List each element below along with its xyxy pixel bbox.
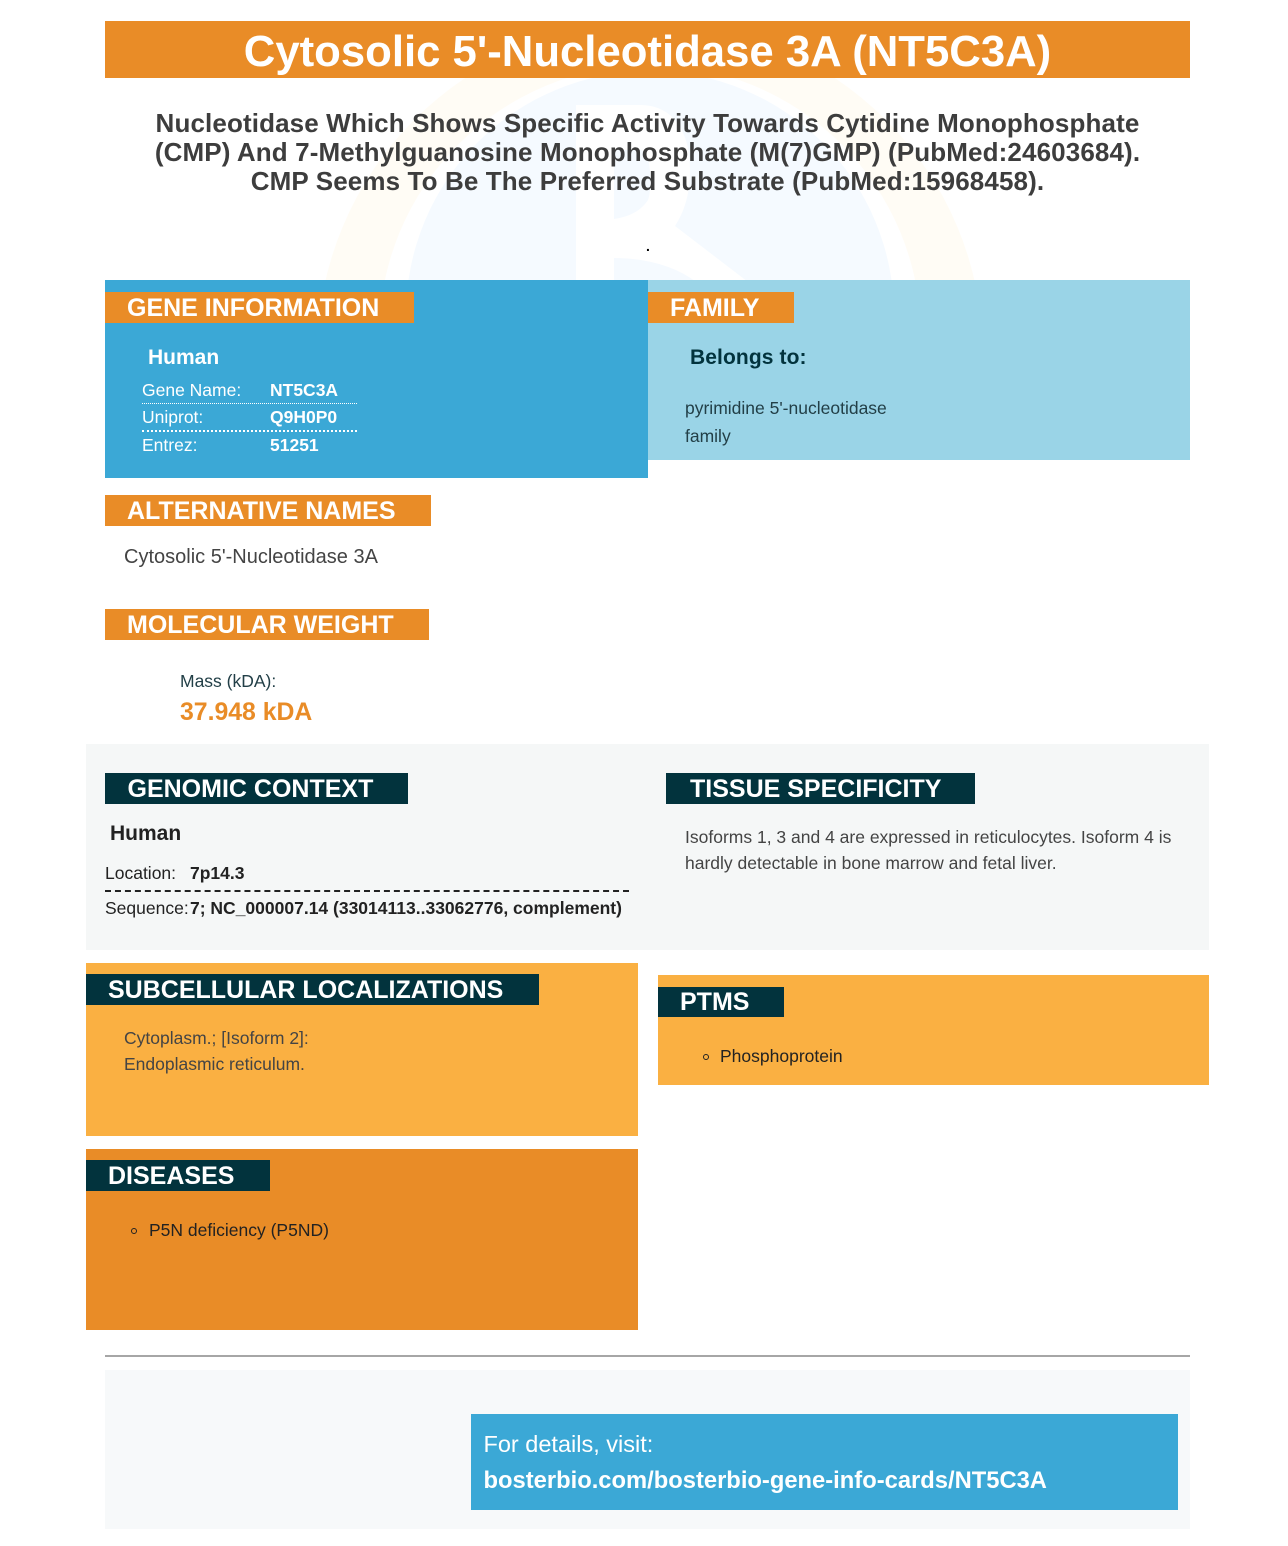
- family text: pyrimidine 5'-nucleotidase: [685, 398, 887, 418]
- alternative names text: Cytosolic 5'-Nucleotidase 3A: [124, 546, 378, 568]
- heading: gene information: GENE INFORMATION: [127, 294, 379, 322]
- localization text: Endoplasmic reticulum.: [124, 1054, 305, 1074]
- subtitle description: (CMP) And 7-Methylguanosine Monophosphate (M(7)GMP) (PubMed:24603684).: [155, 137, 1140, 167]
- panel: footer: [105, 1370, 1190, 1529]
- location row: 7p14.3: [190, 863, 244, 883]
- localization text: Cytoplasm.; [Isoform 2]:: [124, 1028, 309, 1048]
- localization text: [124, 1028, 309, 1074]
- uniprot row: Q9H0P0: [270, 407, 337, 427]
- heading: alternative names: ALTERNATIVE NAMES: [127, 497, 396, 525]
- heading: ptms: PTMS: [680, 988, 749, 1016]
- callout url: bosterbio.com/bosterbio-gene-info-cards/NT5C3A: [484, 1467, 1047, 1494]
- entrez row: [142, 435, 319, 455]
- sequence row: Sequence:: [105, 898, 189, 918]
- tissue specificity text: Isoforms 1, 3 and 4 are expressed in reticulocytes. Isoform 4 is: [685, 827, 1171, 847]
- species label: Human: [148, 346, 219, 369]
- heading: ptms: [658, 987, 784, 1017]
- heading: diseases: [86, 1160, 270, 1191]
- location row: [105, 861, 629, 892]
- gene name row: Gene Name:: [142, 380, 241, 400]
- gene name row: NT5C3A: [270, 380, 338, 400]
- disease list item: P5N deficiency (P5ND): [149, 1220, 329, 1240]
- panel: family: [648, 280, 1190, 460]
- title banner: Cytosolic 5'-Nucleotidase 3A (NT5C3A): [244, 27, 1051, 76]
- heading: genomic context: GENOMIC CONTEXT: [128, 775, 373, 803]
- mass value: 37.948 kDA: [180, 699, 312, 726]
- entrez row: Entrez:: [142, 435, 197, 455]
- small dot: .: [646, 238, 650, 254]
- uniprot row: Uniprot:: [142, 407, 203, 427]
- heading: family: FAMILY: [670, 294, 759, 322]
- species label: Human: [110, 822, 181, 845]
- family text: family: [685, 426, 731, 446]
- heading: family: [648, 292, 794, 323]
- subtitle description: Nucleotidase Which Shows Specific Activity Towards Cytidine Monophosphate: [156, 108, 1139, 138]
- callout label: For details, visit:: [484, 1431, 653, 1457]
- tissue specificity text: hardly detectable in bone marrow and fetal liver.: [685, 853, 1057, 873]
- uniprot row: [142, 405, 357, 432]
- panel: genomic band: [86, 744, 1209, 950]
- location row: Location:: [105, 863, 176, 883]
- heading: diseases: DISEASES: [108, 1162, 234, 1190]
- tissue specificity text: [685, 827, 1171, 873]
- callout: details link: [471, 1414, 1178, 1510]
- family text: [685, 398, 887, 446]
- panel: gene information: [105, 280, 648, 478]
- panel: ptms: [658, 975, 1209, 1085]
- heading: subcellular localizations: SUBCELLULAR LOCALIZATIONS: [108, 976, 503, 1004]
- belongs to label: Belongs to:: [690, 346, 807, 369]
- panel: diseases: [86, 1149, 638, 1330]
- heading: tissue specificity: TISSUE SPECIFICITY: [690, 775, 941, 803]
- title banner: [105, 21, 1190, 78]
- subtitle description: CMP Seems To Be The Preferred Substrate (PubMed:15968458).: [251, 166, 1044, 196]
- subtitle description: [155, 108, 1140, 196]
- ptm list item: Phosphoprotein: [720, 1046, 843, 1066]
- mass label: Mass (kDA):: [180, 671, 276, 691]
- panel: subcellular localizations: [86, 963, 638, 1136]
- gene name row: [142, 378, 357, 404]
- entrez row: 51251: [270, 435, 319, 455]
- watermark logo: [326, 78, 974, 280]
- sequence row: 7; NC_000007.14 (33014113..33062776, complement): [190, 898, 622, 918]
- heading: molecular weight: MOLECULAR WEIGHT: [127, 611, 394, 639]
